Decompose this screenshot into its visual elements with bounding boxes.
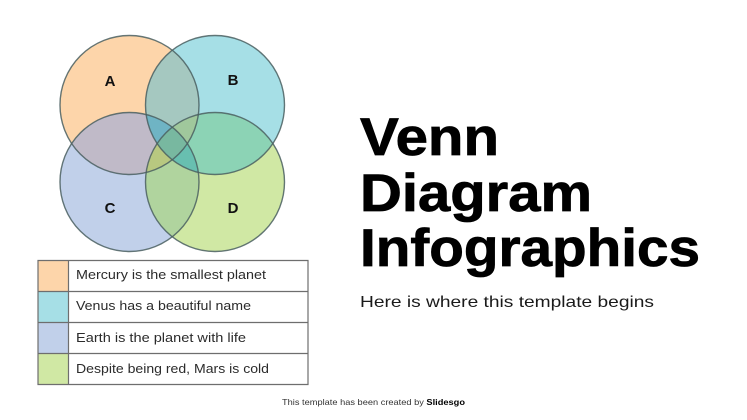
table grid <box>38 260 308 384</box>
overlap B and D <box>188 112 272 174</box>
overlap A and B <box>146 51 198 126</box>
swatch: A <box>38 260 69 292</box>
legend text: Venus: Venus has a beautiful name <box>76 298 251 313</box>
circle D <box>146 112 284 252</box>
triple overlap A B C <box>146 115 172 142</box>
label B: B <box>228 72 239 89</box>
title <box>360 108 700 278</box>
circle C <box>60 112 199 252</box>
legend text: Mercury: Mercury is the smallest planet <box>76 267 266 282</box>
circle A <box>60 36 199 174</box>
venn diagram <box>60 30 285 260</box>
label A: A <box>105 73 116 90</box>
swatch: B <box>38 292 69 322</box>
circle outlines <box>60 36 284 252</box>
legend table <box>38 260 308 384</box>
triple overlap A B D <box>174 116 198 142</box>
overlap A and C <box>72 113 156 174</box>
overlap C and D <box>146 160 198 236</box>
swatch: C <box>38 322 69 354</box>
label D: D <box>228 200 239 217</box>
triple overlap B C D <box>173 144 198 172</box>
legend text: Mars: Despite being red, Mars is cold <box>76 361 269 376</box>
label C: C <box>105 200 116 217</box>
title line 2: Diagram <box>360 164 592 223</box>
title line 1: Venn <box>360 108 499 167</box>
subtitle: Here is where this template begins <box>360 294 654 311</box>
legend text: Earth: Earth is the planet with life <box>76 330 246 345</box>
footer credit: This template has been created by Slidesgo <box>282 397 465 407</box>
circle B <box>146 36 284 174</box>
swatch: D <box>38 354 69 384</box>
triple overlap A C D <box>147 145 171 172</box>
title line 3: Infographics <box>360 219 700 278</box>
quadruple overlap <box>158 128 186 159</box>
